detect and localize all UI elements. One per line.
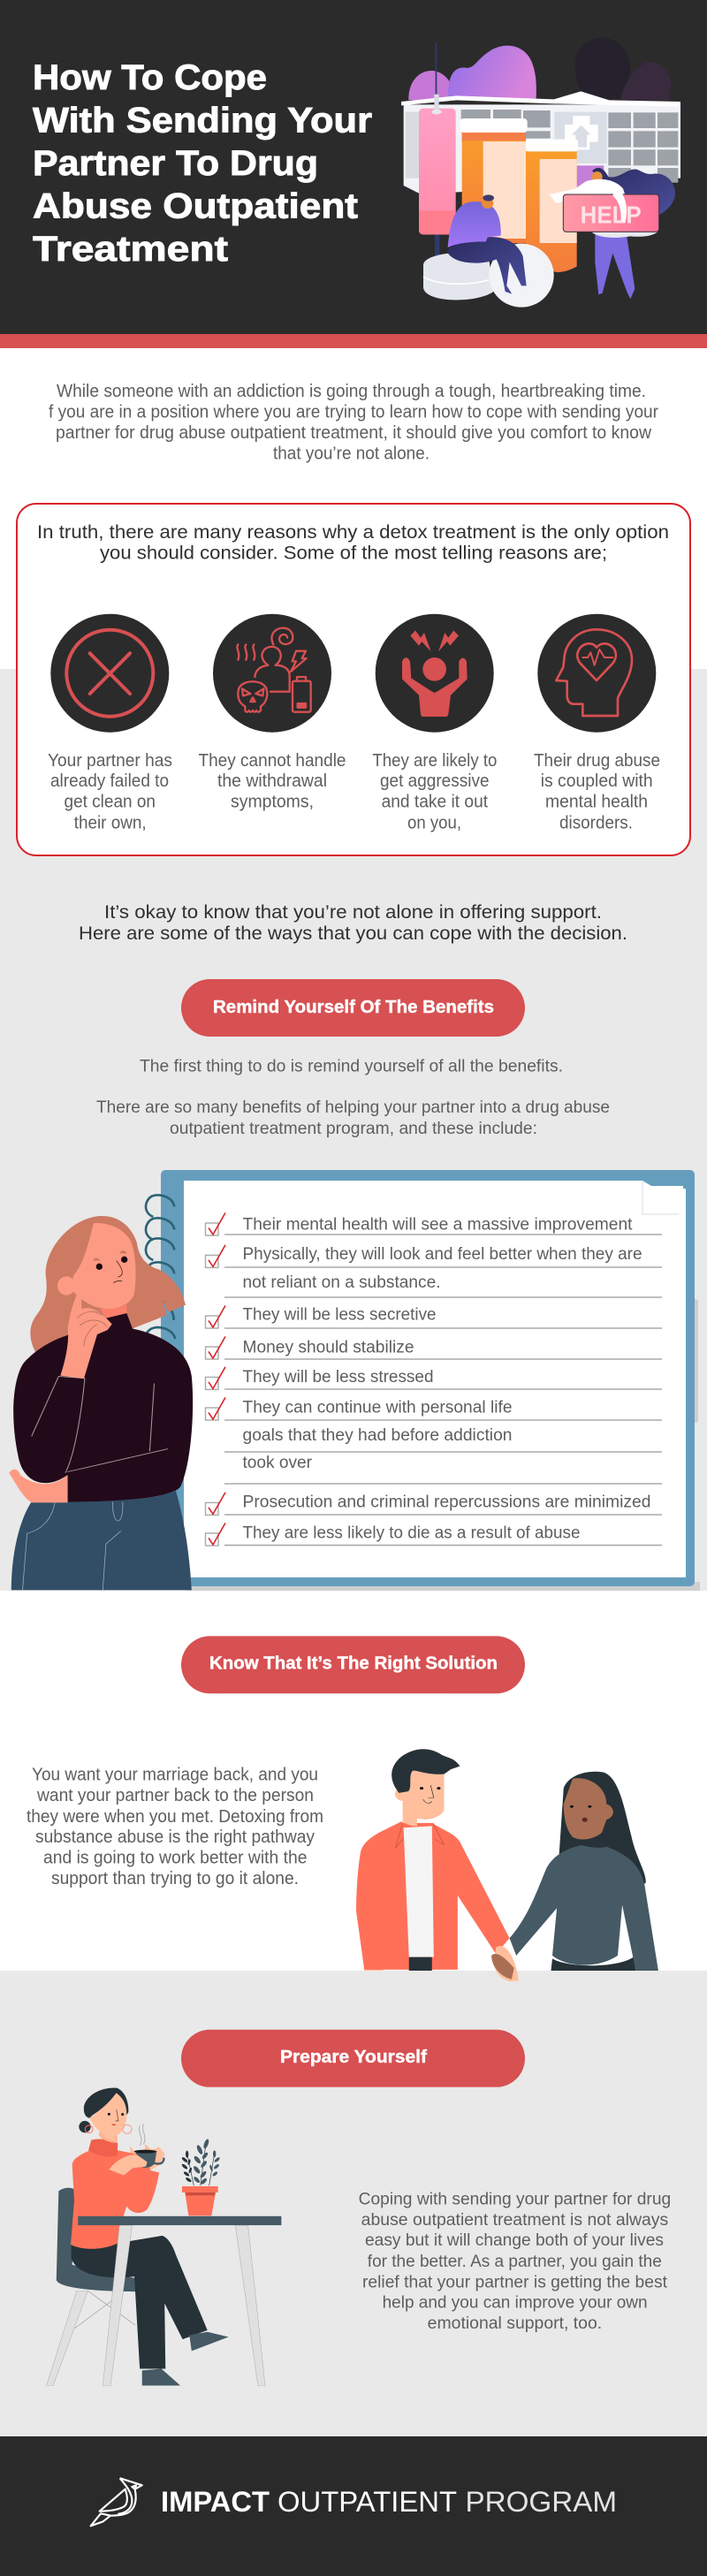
reason caption 3: and take it out: [382, 793, 489, 812]
benefit items text: They are less likely to die as a result of abuse: [242, 1524, 580, 1543]
check mark 1: [205, 1212, 225, 1235]
intro text: [49, 382, 658, 463]
right solution text: they were when you met. Detoxing from: [27, 1807, 323, 1827]
table: [78, 2216, 281, 2385]
logo: wordmark: [161, 2486, 617, 2518]
prepare yourself text: emotional support, too.: [428, 2314, 602, 2333]
reason caption 3: on you,: [407, 813, 461, 832]
prepare yourself text: relief that your partner is getting the best: [362, 2273, 668, 2291]
section heading pill: right solution: Know That It’s The Right Solution: [209, 1654, 498, 1674]
benefit items text: They will be less stressed: [242, 1368, 433, 1387]
right solution text: substance abuse is the right pathway: [35, 1828, 315, 1847]
support statement: It’s okay to know that you’re not alone in offering support.: [104, 902, 602, 923]
panel heading: In truth, there are many reasons why a detox treatment is the only option: [37, 522, 669, 543]
section heading pill: remind yourself: [181, 979, 525, 1037]
check mark 6: [205, 1397, 225, 1420]
reason caption 1: get clean on: [64, 793, 156, 812]
woman face and hand: [57, 1223, 136, 1379]
benefits intro text: The first thing to do is remind yourself of all the benefits.: [140, 1057, 563, 1075]
reason caption 1: Your partner has: [48, 751, 172, 771]
right solution text: [27, 1766, 323, 1888]
benefit items text: took over: [242, 1454, 313, 1472]
benefit items text: They will be less secretive: [242, 1306, 437, 1325]
support statement: Here are some of the ways that you can cope with the decision.: [79, 923, 627, 944]
section heading pill: prepare yourself: Prepare Yourself: [280, 2048, 427, 2067]
woman partner: [510, 1772, 658, 1971]
section heading pill: remind yourself: Remind Yourself Of The Benefits: [213, 998, 494, 1017]
check mark 7: [205, 1493, 225, 1515]
reason caption 3: [372, 751, 497, 832]
icon: failed, X in circle: [50, 614, 169, 733]
panel: reasons for detox treatment: [17, 504, 690, 855]
benefits intro text: There are so many benefits of helping your partner into a drug abuse: [96, 1098, 610, 1117]
illustration: woman at table with coffee and plant: [47, 2088, 281, 2385]
logo: wordmark: OUTPATIENT: [277, 2486, 457, 2518]
right solution text: and is going to work better with the: [43, 1849, 308, 1868]
reason caption 4: is coupled with: [541, 771, 653, 791]
reason caption 4: mental health: [545, 793, 648, 812]
icon: withdrawal symptoms: [213, 614, 331, 733]
benefit items text: Their mental health will see a massive improvement: [242, 1215, 633, 1234]
illustration: couple holding hands: [356, 1749, 658, 1981]
check mark 8: [205, 1523, 225, 1546]
header panel: [0, 0, 707, 348]
reason caption 2: [198, 751, 346, 812]
benefit items text: They can continue with personal life: [242, 1399, 513, 1417]
logo: wordmark: IMPACT: [161, 2486, 270, 2518]
potted plant: [181, 2139, 221, 2215]
prepare yourself text: abuse outpatient treatment is not always: [361, 2211, 668, 2230]
reason caption 3: They are likely to: [372, 751, 497, 771]
reason caption 2: symptoms,: [231, 793, 314, 812]
title: How To Cope: [33, 58, 267, 97]
reason caption 4: disorders.: [559, 813, 633, 832]
prepare yourself text: [359, 2191, 671, 2333]
logo: bird icon: [91, 2478, 142, 2526]
benefit items text: Money should stabilize: [242, 1339, 414, 1357]
section heading pill: prepare yourself: [181, 2030, 525, 2087]
reason caption 4: [534, 751, 660, 832]
reason caption 2: They cannot handle: [198, 751, 346, 771]
title: Partner To Drug: [33, 144, 318, 183]
title: With Sending Your: [33, 101, 372, 140]
intro text: that you’re not alone.: [273, 444, 430, 463]
woman upper body with cup: [71, 2088, 165, 2249]
check mark 4: [205, 1336, 225, 1359]
intro text: partner for drug abuse outpatient treatment, it should give you comfort to know: [56, 423, 652, 443]
panel heading: you should consider. Some of the most telling reasons are;: [100, 543, 607, 564]
check mark 2: [205, 1245, 225, 1267]
panel heading: [37, 522, 669, 564]
benefit items text: [242, 1215, 650, 1543]
right solution text: support than trying to go it alone.: [51, 1869, 299, 1888]
chair and lower body: [47, 2188, 229, 2385]
support statement: [79, 902, 627, 944]
help sign label: HELP: [581, 201, 642, 229]
reason caption 1: [48, 751, 172, 832]
title: [33, 58, 372, 269]
prepare yourself text: easy but it will change both of your lives: [365, 2231, 664, 2250]
title: Abuse Outpatient: [33, 187, 358, 226]
reason caption 1: their own,: [74, 813, 147, 832]
woman body: [9, 1313, 193, 1590]
reason caption 4: Their drug abuse: [534, 751, 660, 771]
prepare yourself text: for the better. As a partner, you gain the: [368, 2253, 662, 2271]
intro text: f you are in a position where you are trying to learn how to cope with sending your: [49, 403, 658, 422]
benefits intro text: outpatient treatment program, and these include:: [170, 1120, 537, 1138]
footer: [0, 2436, 707, 2576]
title: Treatment: [33, 230, 228, 269]
logo: wordmark: PROGRAM: [465, 2486, 617, 2518]
notebook rings: [146, 1195, 175, 1339]
section heading pill: right solution: [181, 1636, 525, 1693]
check mark 3: [205, 1305, 225, 1328]
man partner: [356, 1749, 519, 1981]
benefit items text: Physically, they will look and feel better when they are: [242, 1245, 642, 1264]
woman hair: [30, 1216, 186, 1352]
intro text: While someone with an addiction is going through a tough, heartbreaking time.: [57, 382, 646, 401]
right solution text: want your partner back to the person: [36, 1786, 314, 1805]
icon: aggressive person: [376, 614, 494, 733]
illustration: thinking woman: [9, 1216, 193, 1590]
prepare yourself text: help and you can improve your own: [383, 2294, 648, 2312]
icon: head with heart: [537, 614, 656, 733]
benefit items text: Prosecution and criminal repercussions are minimized: [242, 1493, 650, 1512]
checklist rules: [224, 1235, 662, 1546]
right solution text: You want your marriage back, and you: [32, 1766, 318, 1785]
benefit items text: goals that they had before addiction: [242, 1426, 513, 1445]
reason caption 3: get aggressive: [380, 771, 490, 791]
benefit items text: not reliant on a substance.: [242, 1273, 440, 1292]
page background: grey band behind reasons and benefits: [0, 669, 707, 1591]
notebook with benefits checklist: [146, 1170, 700, 1591]
illustration: hospital, pill bottles and people: [401, 38, 680, 308]
check mark 5: [205, 1367, 225, 1389]
reason caption 1: already failed to: [50, 771, 169, 791]
benefits intro text: [96, 1057, 610, 1138]
prepare yourself text: Coping with sending your partner for drug: [359, 2191, 671, 2209]
page background: grey band behind prepare yourself: [0, 1971, 707, 2439]
reason caption 2: the withdrawal: [217, 771, 327, 791]
